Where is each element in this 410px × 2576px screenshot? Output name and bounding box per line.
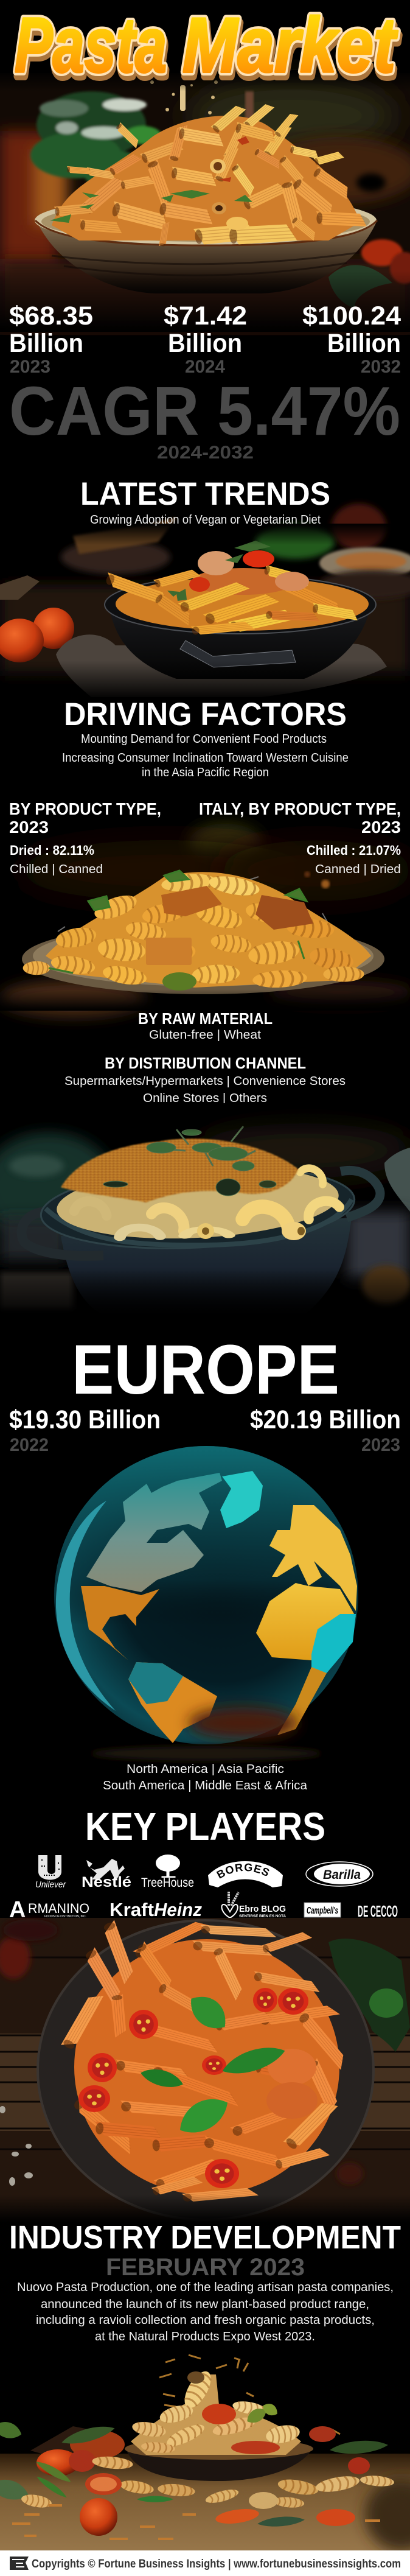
text: other regions (103, 1763, 308, 1792)
panel: macaroni pot photo (0, 1103, 410, 1321)
text: other regions: South America | Middle East & Africa (103, 1779, 308, 1792)
segmentation: by raw material: Gluten-free | Wheat (149, 1028, 261, 1042)
segmentation: Italy by product type 2023: 2023 (361, 818, 401, 837)
footer logo (10, 2557, 29, 2570)
text: industry development details: including a ravioli collection and fresh organic pasta products, (36, 2314, 375, 2327)
stat: 2032: $100.24 (302, 301, 401, 331)
title outline (15, 2, 398, 88)
blurred background (0, 1123, 410, 1309)
southern USA and Mexico (81, 1586, 159, 1660)
title (15, 2, 399, 93)
heading: Europe: EUROPE (72, 1331, 339, 1409)
logo: TreeHouse: TreeHouse (141, 1876, 194, 1890)
falling pasta bits (159, 2355, 340, 2434)
logo: Campbell's (304, 1903, 341, 1917)
date: FEBRUARY 2023 (106, 2254, 305, 2281)
segmentation: by product type 2023: Chilled | Canned (10, 863, 103, 876)
stat: 2032 (302, 301, 401, 377)
title shadow (16, 6, 399, 93)
logo: Unilever (35, 1855, 66, 1890)
title outline: Pasta (15, 2, 167, 88)
panel: penne plate top-down photo (0, 1917, 410, 2222)
text: driving factors list: Increasing Consumer Inclination Toward Western Cuisine (62, 751, 349, 765)
basil leaves (139, 1988, 288, 2141)
title fill: Pasta (15, 2, 167, 88)
text: latest trend: Growing Adoption of Vegan or Vegetarian Diet (90, 513, 321, 527)
panel: pan of penne photo (0, 504, 410, 700)
text: driving factors list: Mounting Demand for Convenient Food Products (81, 732, 327, 746)
fusilli on table (20, 2455, 395, 2510)
panel: fusilli plate photo (0, 824, 410, 1017)
text: industry development details: at the Natural Products Expo West 2023. (95, 2330, 315, 2343)
segmentation: by product type 2023 (9, 799, 161, 876)
Europe value 2023: 2023 (361, 1435, 400, 1455)
globe sphere (54, 1446, 358, 1744)
logo: KraftHeinz (109, 1899, 202, 1920)
segmentation: by distribution channel: Supermarkets/Hypermarkets | Convenience Stores (64, 1075, 346, 1088)
fusilli on bowl (131, 2367, 301, 2455)
logo: Ebro (221, 1891, 287, 1918)
fusilli mound (23, 871, 371, 991)
key player logos (9, 1855, 398, 1923)
stat: 2032: 2032 (361, 357, 401, 377)
segmentation: by distribution channel (64, 1054, 346, 1105)
plate (38, 1920, 374, 2220)
South America (128, 1662, 217, 1743)
stat: 2024: 2024 (185, 357, 225, 377)
globe illustration (54, 1446, 358, 1761)
panel: fusilli table scene photo (0, 2355, 410, 2551)
tomatoes (0, 575, 74, 662)
stat: 2032: Billion (327, 329, 401, 358)
segmentation: by distribution channel: Online Stores | Others (143, 1092, 267, 1105)
Europe value 2023 (250, 1405, 401, 1455)
logo: Armanino: FOODS OF DISTINCTION, INC. (44, 1915, 86, 1918)
tomatoes and leaves on table (35, 2474, 355, 2536)
dark background with embers (0, 824, 410, 1017)
pan (105, 575, 376, 679)
background bowl and tomatoes (0, 2419, 389, 2504)
tomatoes (78, 1988, 308, 2188)
market stats (9, 301, 401, 377)
panel: hero pasta bowl photo (0, 70, 410, 335)
Europe (269, 1505, 357, 1611)
Africa (256, 1583, 356, 1660)
stat: 2023: 2023 (10, 357, 50, 377)
stat: 2024: Billion (168, 329, 242, 358)
East Africa teal (311, 1614, 356, 1673)
stat: 2024: $71.42 (164, 301, 247, 331)
table (0, 2454, 410, 2550)
logo: Armanino: A (9, 1897, 26, 1923)
plate (22, 924, 384, 994)
logo: KraftHeinz: Kraft (109, 1899, 154, 1920)
bowl (35, 196, 377, 293)
logo: Nestle (82, 1859, 131, 1890)
segmentation: Italy by product type 2023 (199, 799, 401, 876)
logo: Armanino: RMANINO (28, 1901, 89, 1916)
text: industry development details: announced the launch of its new plant-based product range, (41, 2298, 369, 2311)
penne in pan (103, 541, 369, 636)
pot fade (0, 1269, 410, 1321)
table bits (12, 2505, 380, 2539)
heading: key players: KEY PLAYERS (85, 1805, 325, 1848)
table vignette (365, 2478, 410, 2551)
Europe value 2022 (9, 1405, 161, 1455)
text: industry development details (17, 2281, 394, 2343)
penne mound (50, 80, 367, 247)
logo: KraftHeinz: Heinz (154, 1899, 202, 1920)
heading: latest trends: LATEST TRENDS (80, 476, 330, 512)
hero fade (0, 271, 410, 332)
segmentation: Italy by product type 2023: Chilled : 21.07% (307, 843, 401, 858)
stat: 2023: $68.35 (9, 301, 93, 331)
heading: driving factors: DRIVING FACTORS (64, 697, 347, 732)
stat: 2023 (9, 301, 93, 377)
logo: Armanino (9, 1897, 89, 1923)
Europe value 2022: 2022 (10, 1435, 49, 1455)
text: driving factors list: in the Asia Pacific Region (142, 766, 269, 779)
Europe value 2022: $19.30 Billion (9, 1405, 161, 1434)
North America (86, 1473, 222, 1592)
text: industry development details: Nuovo Pasta Production, one of the leading artisan pasta companies, (17, 2281, 394, 2294)
fades (0, 661, 410, 700)
herbs (103, 1126, 276, 1196)
fusilli photo fade (0, 989, 410, 1011)
stat: 2024 (164, 301, 247, 377)
logo: Unilever: Unilever (35, 1879, 66, 1890)
text: driving factors list (62, 732, 349, 779)
logo: Barilla (306, 1862, 373, 1886)
segmentation: by product type 2023: Dried : 82.11% (10, 843, 94, 858)
bowl (125, 2438, 313, 2481)
wood table (0, 1918, 410, 2222)
footer bar (0, 2550, 410, 2576)
segmentation: by raw material (138, 1009, 273, 1042)
penne pieces (61, 1917, 350, 2203)
text: other regions: North America | Asia Pacific (127, 1763, 284, 1776)
segmentation: by raw material: BY RAW MATERIAL (138, 1009, 273, 1028)
crumb crust (61, 1139, 298, 1202)
logo: Campbell's: Campbell's (307, 1906, 338, 1916)
Greenland (220, 1471, 263, 1528)
globe reflection (91, 1746, 322, 1761)
segmentation: Italy by product type 2023: Canned | Dried (315, 863, 401, 876)
tomatoes and basil right (328, 239, 410, 311)
logo: Ebro: Ebro BLOG (239, 1904, 286, 1914)
logo: Borges: BORGES (217, 1863, 269, 1879)
green foliage (30, 91, 161, 190)
pot body and handles (22, 1159, 380, 1315)
logo: Nestle: Nestlé (82, 1874, 131, 1890)
orange glow base (189, 1707, 298, 1739)
background props (0, 504, 410, 676)
logo: Ebro: SENTIRSE BIEN ES NOTA (239, 1915, 287, 1918)
logo: Barilla: Barilla (323, 1868, 361, 1882)
left highlight (56, 1501, 116, 1711)
segmentation: by product type 2023: 2023 (9, 818, 49, 837)
title shadow: Pasta (16, 6, 168, 93)
segmentation: by product type 2023: BY PRODUCT TYPE, (9, 799, 161, 818)
cloth (56, 634, 387, 697)
pasta base (74, 1939, 339, 2195)
macaroni (55, 1160, 341, 1245)
plate fade (0, 2195, 410, 2222)
logo: Borges (208, 1861, 283, 1887)
CAGR period: 2024-2032 (157, 443, 254, 463)
lower right crescent (277, 1667, 327, 1735)
logo: TreeHouse (141, 1855, 194, 1890)
stat: 2023: Billion (9, 329, 83, 358)
blurred restaurant background (0, 73, 410, 335)
title fill (15, 2, 398, 88)
segmentation: by distribution channel: BY DISTRIBUTION CHANNEL (105, 1054, 306, 1072)
